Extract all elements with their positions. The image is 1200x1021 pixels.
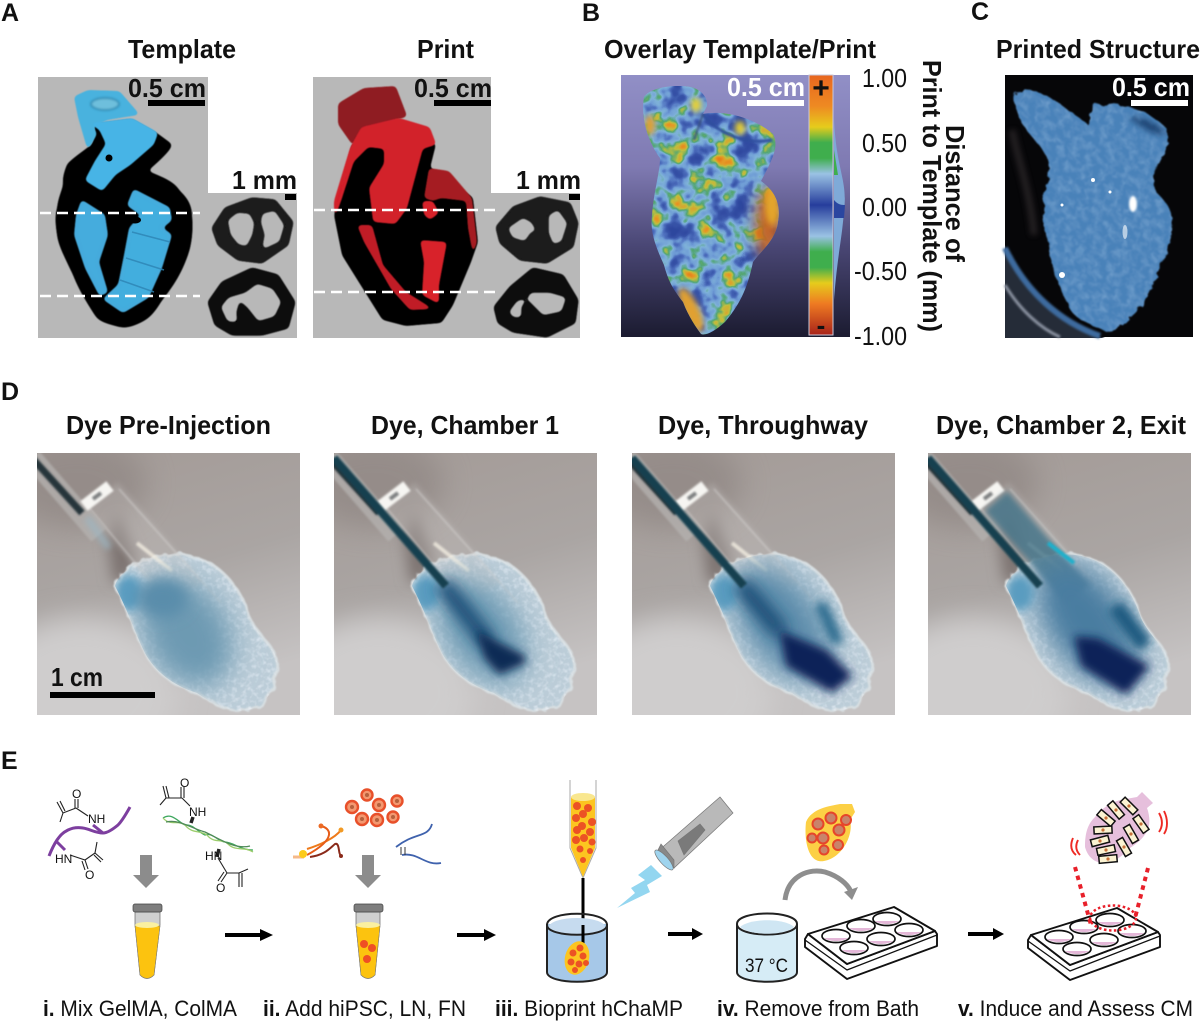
step iv illustration [737, 804, 937, 982]
methacrylamide groups on gelatin [57, 799, 103, 870]
heading: Dye, Throughway: Dye, Throughway [658, 410, 869, 440]
step i illustration: O [85, 868, 94, 882]
arrow ii to iii [457, 929, 496, 941]
needle [582, 878, 584, 944]
template left chamber [75, 201, 107, 295]
panel label D: D [1, 378, 19, 406]
step i illustration: O [216, 881, 225, 895]
caption i: i. Mix GelMA, ColMA [43, 996, 237, 1021]
tube i [133, 904, 162, 978]
well plate [1028, 908, 1160, 980]
step i illustration [49, 776, 253, 895]
step i illustration: O [72, 787, 81, 801]
scale bar: 1 cm [50, 662, 155, 698]
removed gel with cells [806, 804, 855, 861]
axis title: distance of print to template: Print to Template (mm) [917, 60, 947, 332]
histogram [834, 118, 845, 300]
heading: Overlay Template/Print: Overlay Template/Print [604, 34, 876, 64]
template heart black section [56, 119, 193, 327]
scale bar: 1 cm: 1 cm [51, 662, 103, 692]
well plate [805, 907, 937, 979]
print cross sections [494, 197, 578, 337]
UV lamp [652, 797, 733, 872]
printed heart [1012, 88, 1174, 333]
print lower left wall [357, 225, 433, 310]
color scale bar [809, 75, 833, 335]
color scale tick labels: -0.50 [854, 256, 907, 286]
red motion arcs [1071, 811, 1167, 855]
step i illustration: NH [88, 812, 105, 826]
caption iv: iv. Remove from Bath [717, 996, 919, 1021]
template right chamber [104, 190, 171, 312]
arrow iv to v [968, 928, 1004, 940]
collagen helix [163, 816, 253, 852]
print small patch [422, 201, 439, 220]
heading: Template: Template [128, 34, 236, 64]
highlights [1059, 178, 1137, 278]
printed gel in bath [561, 938, 593, 978]
heading: Print: Print [417, 34, 474, 64]
fibronectin [396, 824, 441, 863]
arrow iii to iv [668, 928, 703, 940]
minus sign: - [817, 310, 825, 340]
template section lines [40, 213, 200, 296]
caption ii: ii. Add hiPSC, LN, FN [263, 996, 466, 1021]
step i illustration: NH [189, 805, 206, 819]
step i illustration: HN [55, 852, 72, 866]
panel: printed structure photo [1005, 75, 1193, 340]
panel: overlay heat map [621, 72, 850, 340]
print red main upper and left wall [335, 119, 435, 223]
print lower middle wall [420, 240, 447, 304]
laminin [293, 824, 344, 858]
scale bar: template 1 mm: 1 mm [232, 165, 297, 195]
template septum hole [106, 154, 112, 162]
axis title: distance of print to template [917, 60, 970, 332]
print red vessel upper [339, 87, 406, 144]
print section lines [314, 210, 495, 292]
print black section [335, 144, 477, 325]
beaker with bath [547, 914, 607, 982]
photo: dye throughway [632, 453, 895, 715]
pink tissue with cardiomyocytes [1085, 792, 1153, 863]
cells [346, 790, 402, 826]
template blue upper chamber [86, 119, 157, 190]
template small hole [129, 216, 141, 224]
tube ii [354, 904, 383, 978]
template ribs [120, 232, 170, 292]
bath beaker [737, 914, 797, 982]
panel: print heart model [313, 77, 580, 338]
color scale tick labels: 0.50 [862, 128, 907, 158]
photo: dye chamber 1 [334, 453, 597, 715]
step i illustration: HN [205, 849, 222, 863]
heading: Dye Pre-Injection: Dye Pre-Injection [66, 410, 271, 440]
step ii illustration [293, 790, 441, 863]
scale bar: print 0.5 cm: 0.5 cm [414, 73, 492, 103]
photo: dye chamber 2 exit [928, 453, 1191, 715]
heading: Dye, Chamber 1: Dye, Chamber 1 [371, 410, 559, 440]
photo: dye pre-injection [37, 453, 300, 715]
scale bar: template 0.5 cm: 0.5 cm [128, 73, 206, 103]
heading: Dye, Chamber 2, Exit: Dye, Chamber 2, Exit [936, 410, 1186, 440]
caption iii: iii. Bioprint hChaMP [495, 996, 683, 1021]
color scale tick labels [854, 63, 907, 351]
bath temperature: 37 °C [745, 956, 788, 977]
color scale tick labels: 0.00 [862, 192, 907, 222]
scale bar: printed 0.5 cm: 0.5 cm [1112, 72, 1190, 102]
template blue vessel ring [75, 91, 138, 148]
dish edge [1005, 245, 1105, 338]
methacrylamide groups on collagen [160, 786, 248, 887]
red callout dashes [1075, 867, 1148, 930]
step i illustration: O [180, 776, 189, 790]
overlay heart surface [643, 86, 779, 334]
gelatin strand [49, 807, 130, 856]
arrow: gray down ii [355, 855, 381, 888]
arrow: gray down i [133, 855, 159, 888]
arrow i to ii [225, 929, 273, 941]
print right outer wall [424, 168, 477, 255]
color scale tick labels: -1.00 [854, 321, 907, 351]
step v illustration [1028, 792, 1167, 980]
template cross sections [208, 198, 295, 335]
plus sign: + [812, 72, 830, 105]
color scale tick labels: 1.00 [862, 63, 907, 93]
transfer arrow [785, 871, 858, 900]
scale bar: print 1 mm: 1 mm [516, 165, 581, 195]
panel label E: E [1, 747, 18, 775]
template ring opening [91, 98, 119, 110]
UV lightning [617, 865, 662, 908]
syringe [570, 780, 596, 878]
step iii illustration [547, 780, 733, 982]
scale bar: overlay 0.5 cm: 0.5 cm [727, 72, 805, 102]
panel: template heart model [38, 77, 297, 338]
axis title: distance of print to template: Distance of [940, 125, 970, 262]
